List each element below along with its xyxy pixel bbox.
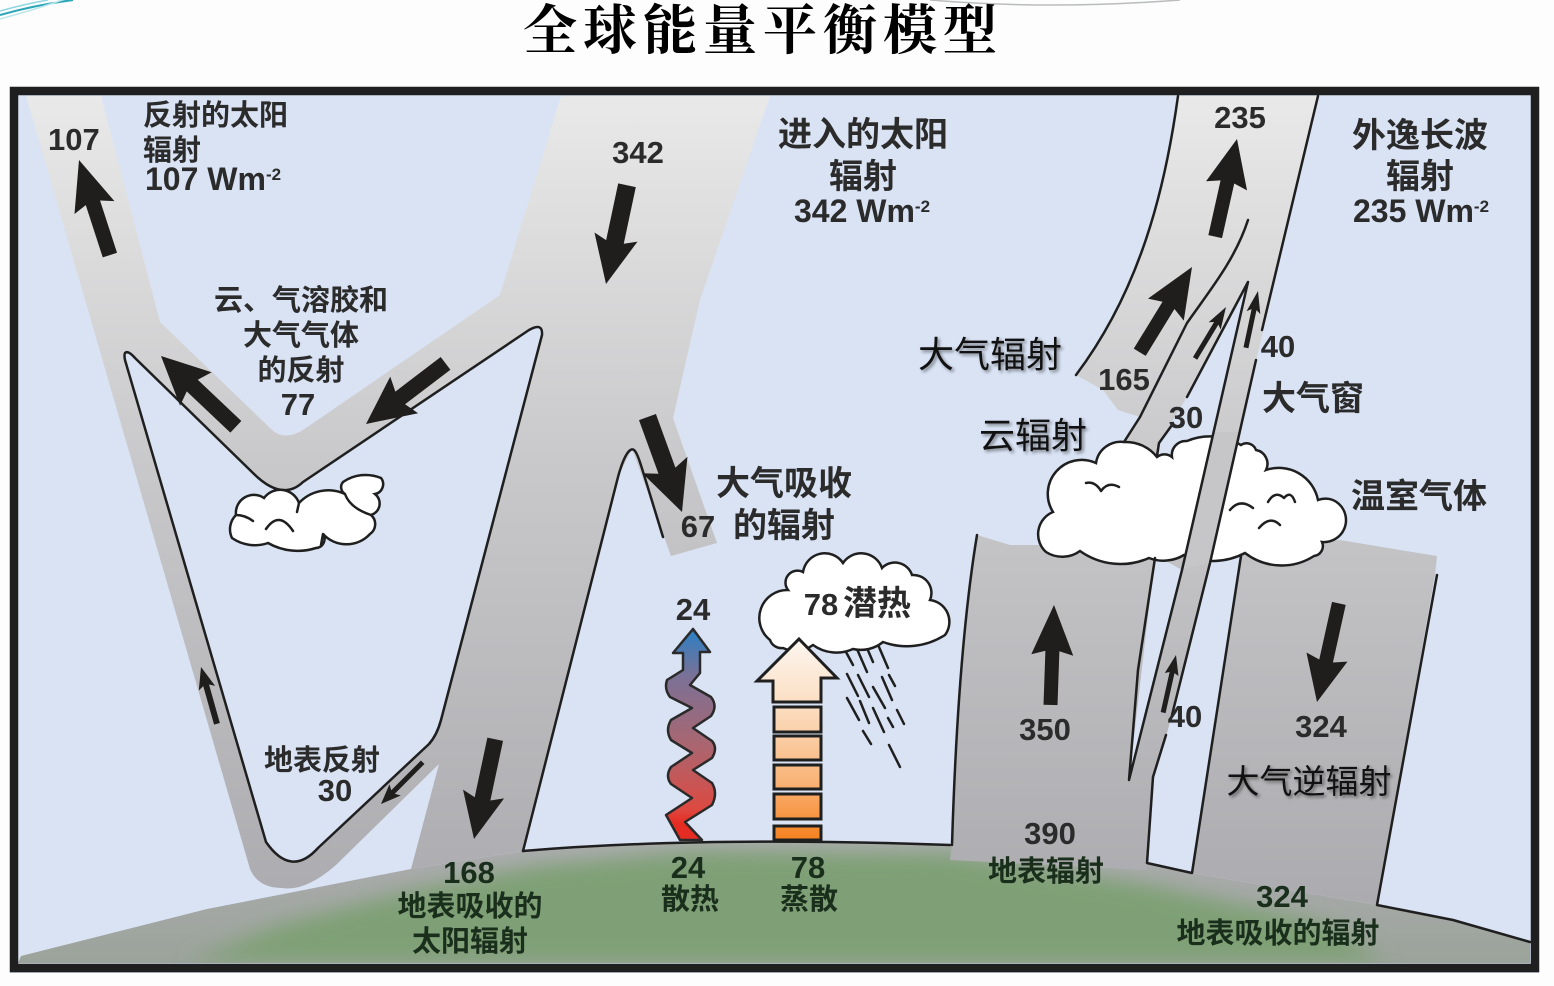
label: incoming solar radiation: -2 (915, 197, 930, 216)
label: surface radiation 390: 地表辐射 (988, 855, 1104, 888)
label: back radiation: 大气逆辐射 (1226, 763, 1392, 800)
cloud: large atmosphere cloud (1038, 436, 1346, 565)
region: enclosed sky loop (124, 327, 542, 862)
arrow: reflected by clouds (145, 339, 252, 443)
label: reflection by clouds, aerosols and gases (214, 284, 388, 422)
arrow: evaporation stack 78 (757, 639, 837, 840)
arrow: atmospheric absorption 67 (625, 409, 705, 520)
label: surface reflection: 地表反射 (264, 744, 380, 777)
value: sensible heat top: 24 (676, 592, 711, 627)
cloud: small reflecting cloud (230, 475, 383, 551)
label: cloud radiation: 云辐射 (979, 415, 1087, 456)
label: reflection by clouds, aerosols and gases: 77 (281, 387, 315, 422)
label: reflected solar radiation: 反射的太阳 (143, 99, 288, 132)
label: absorbed by atmosphere: 67 (681, 509, 715, 544)
label: absorbed by surface 324 (1176, 879, 1380, 950)
label: reflected solar radiation: -2 (266, 165, 281, 184)
label: reflection by clouds, aerosols and gases: 的反射 (257, 354, 345, 387)
ground (18, 842, 1530, 963)
label: thermals 24 (661, 850, 719, 916)
label: absorbed by atmosphere: 的辐射 (733, 507, 835, 545)
decoration: top-left teal lines (0, 0, 73, 19)
label: absorbed by surface 324: 324 (1256, 879, 1309, 914)
label: reflected solar radiation: 107 (48, 122, 100, 157)
label: absorbed by atmosphere: 大气吸收 (716, 465, 852, 503)
label: outgoing longwave radiation: 外逸长波 (1352, 117, 1488, 155)
band: outgoing longwave (1076, 96, 1318, 570)
values: 165, 30, 40: 40 (1261, 329, 1295, 364)
label: thermals 24: 散热 (661, 883, 719, 916)
band: surface radiation 350 (950, 535, 1212, 870)
label: incoming solar radiation: 进入的太阳 (778, 116, 948, 154)
arrow: up 350 (1030, 604, 1075, 706)
label: surface reflection: 30 (318, 773, 352, 808)
title: 全球能量平衡模型 (523, 1, 1003, 61)
label: surface radiation 390 (988, 816, 1104, 888)
values: 165, 30, 40 (1098, 329, 1295, 435)
values: radiation bands (1019, 699, 1348, 747)
label: outgoing longwave radiation: -2 (1474, 197, 1489, 216)
region: sky slit (1129, 555, 1182, 780)
label: reflected solar radiation (48, 99, 288, 197)
line: edge of the absorbed band (523, 449, 663, 851)
label: outgoing longwave radiation (1214, 100, 1489, 229)
region: sky slot (1147, 553, 1241, 873)
arrow: outgoing 235 (1195, 134, 1257, 241)
arrow: small surface reflection up (193, 665, 225, 726)
arrow: toward clouds (352, 345, 459, 442)
band: solar in, reflected and absorbed (26, 96, 770, 889)
label: latent heat: 潜热 (843, 585, 911, 623)
label: outgoing longwave radiation: 235 (1214, 100, 1266, 135)
label: evapotranspiration 78 (780, 850, 838, 916)
band: atmospheric window (1182, 432, 1239, 570)
label: evapotranspiration 78: 78 (791, 850, 825, 885)
label: incoming solar radiation: 342 (612, 135, 664, 170)
label: absorbed by surface 168 (397, 855, 543, 958)
label: surface radiation 390: 390 (1024, 816, 1076, 851)
values: 165, 30, 40: 30 (1169, 400, 1203, 435)
label: reflection by clouds, aerosols and gases: 云、气溶胶和 (214, 284, 388, 317)
label: latent heat (804, 585, 911, 623)
label: surface reflection (264, 744, 380, 808)
label: absorbed by surface 168: 太阳辐射 (412, 925, 528, 958)
arrow: small window 40 lower (1156, 653, 1183, 714)
label: thermals 24: 24 (671, 850, 706, 885)
line: surface horizon (523, 842, 950, 851)
values: 165, 30, 40: 165 (1098, 362, 1150, 397)
arrow: incoming 342 (584, 181, 649, 289)
label: atmospheric radiation: 大气辐射 (918, 334, 1062, 375)
arrow: down 324 (1296, 599, 1359, 707)
label: greenhouse gases: 温室气体 (1351, 478, 1487, 516)
label: latent heat: 78 (804, 587, 838, 622)
band: back radiation 324 (1192, 540, 1437, 905)
label: evapotranspiration 78: 蒸散 (780, 883, 838, 916)
values: radiation bands: 350 (1019, 712, 1071, 747)
cloud: latent heat cloud with rain (759, 553, 949, 767)
values: radiation bands: 324 (1295, 709, 1348, 744)
arrow: atmosphere 165 (1122, 256, 1210, 363)
arrow: small surface reflection down (375, 757, 428, 810)
label: absorbed by surface 324: 地表吸收的辐射 (1176, 917, 1380, 950)
decoration: top arc (930, 0, 1180, 5)
arrow: reflected 107 (59, 154, 130, 262)
values: radiation bands: 40 (1168, 699, 1202, 734)
arrow: sensible heat wave 24 (666, 629, 715, 840)
label: reflection by clouds, aerosols and gases: 大气气体 (243, 319, 359, 352)
label: atmospheric window: 大气窗 (1262, 380, 1364, 418)
lines: right side band edges (952, 96, 1530, 942)
label: absorbed by surface 168: 168 (443, 855, 495, 890)
label: incoming solar radiation: 辐射 (829, 158, 897, 196)
label: reflected solar radiation: 107 Wm (145, 161, 266, 197)
label: incoming solar radiation: 342 Wm (794, 193, 915, 229)
label: outgoing longwave radiation: 辐射 (1386, 158, 1454, 196)
label: outgoing longwave radiation: 235 Wm (1353, 193, 1474, 229)
label: absorbed by atmosphere (681, 465, 852, 545)
arrow: window 40 upper (1239, 290, 1265, 349)
label: reflected solar radiation: 辐射 (143, 134, 201, 167)
arrow: cloud 30 (1189, 303, 1232, 362)
arrow: surface absorbed 168 (453, 735, 516, 843)
label: absorbed by surface 168: 地表吸收的 (397, 890, 543, 923)
label: incoming solar radiation (612, 116, 948, 229)
